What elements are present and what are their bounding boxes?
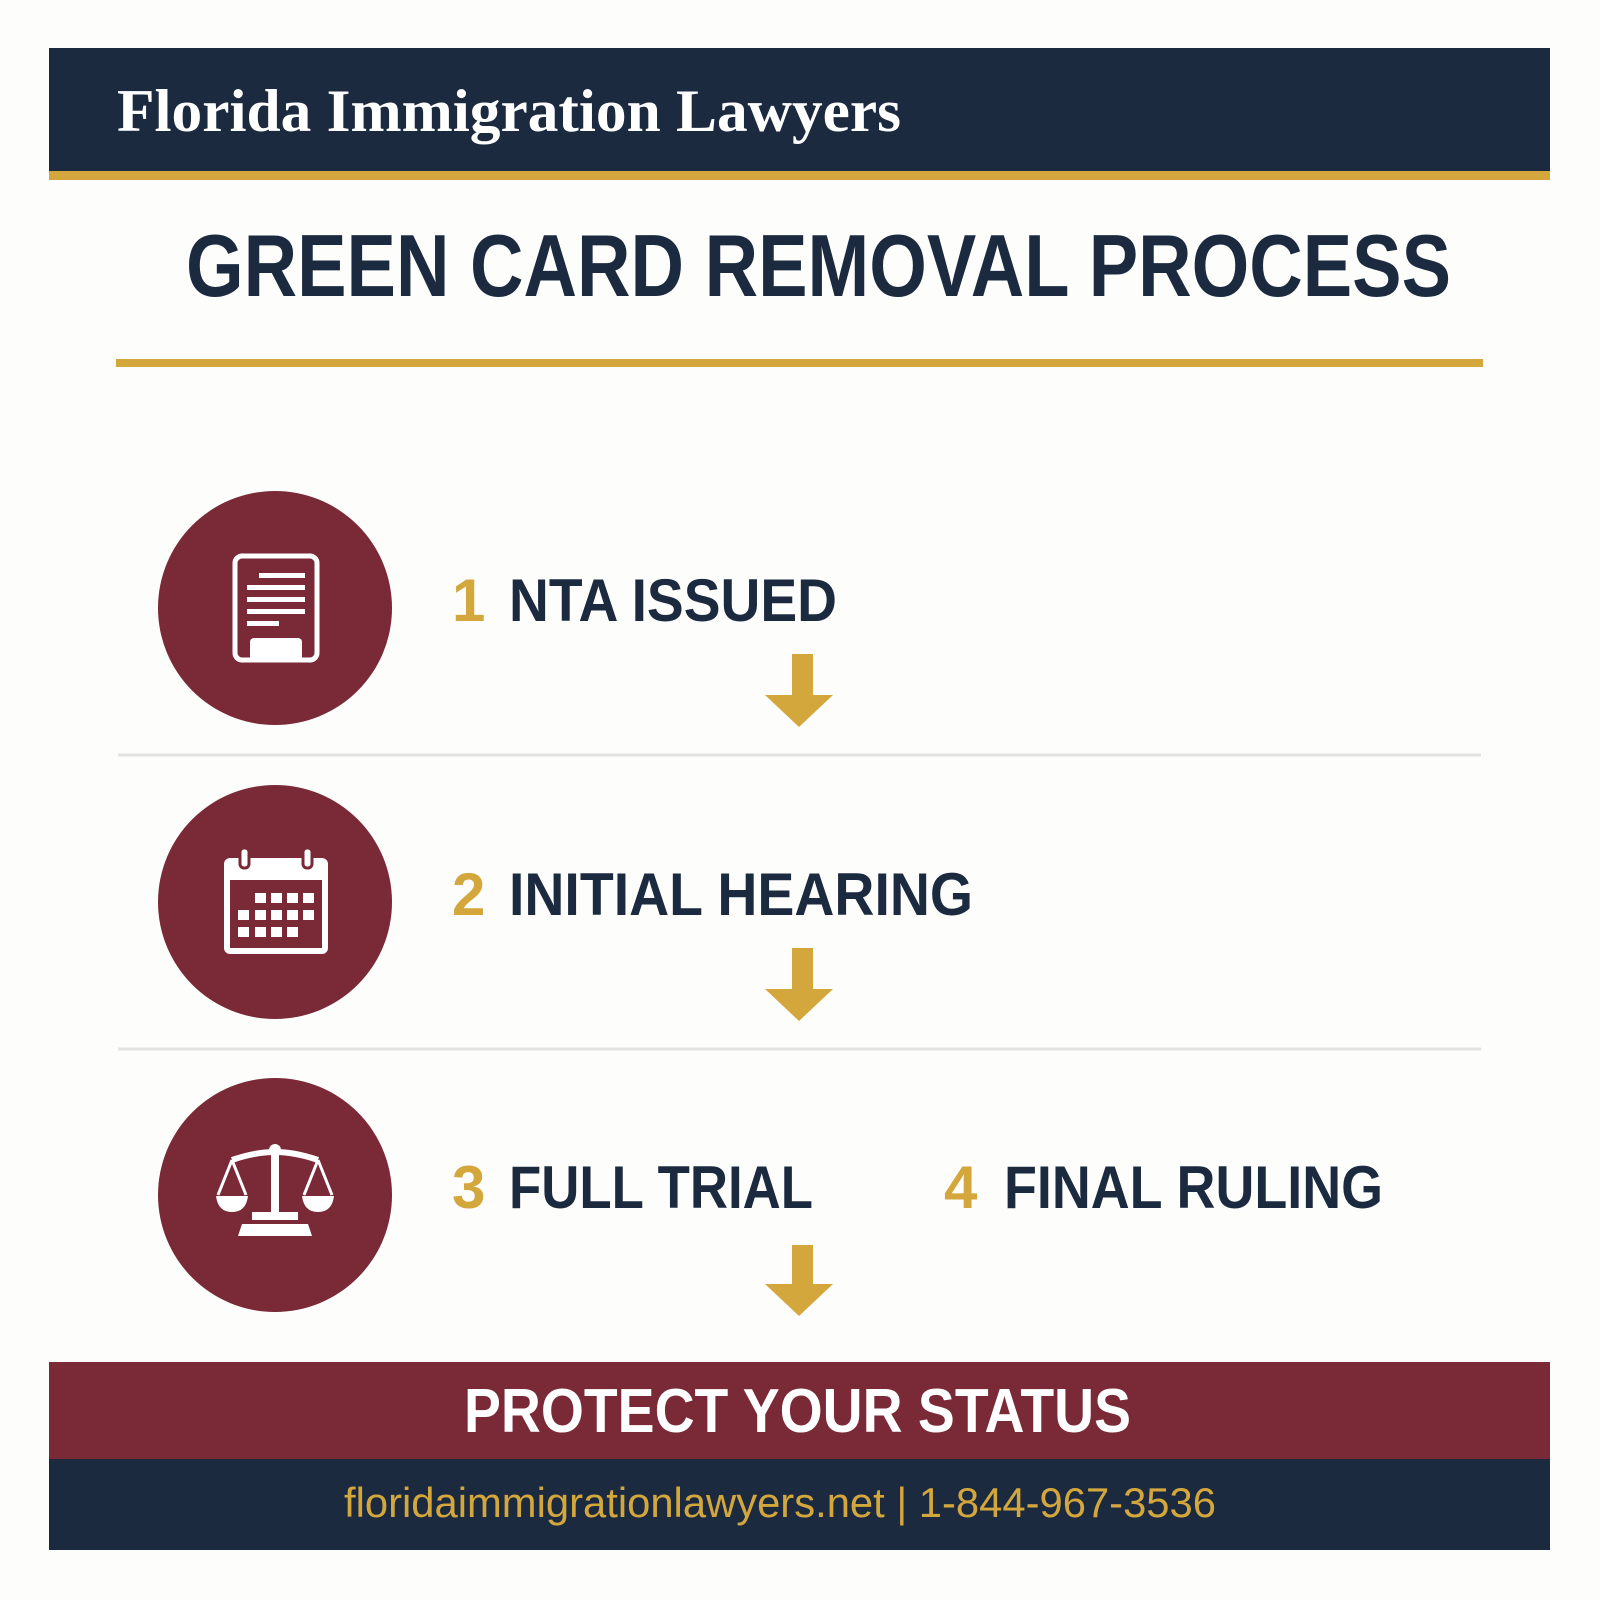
footer contact — [49, 1459, 1550, 1550]
banner: protect your status — [49, 1362, 1550, 1459]
footer contact: floridaimmigrationlawyers.net | 1-844-967-3536 — [344, 1479, 1216, 1526]
label 2: 2 — [452, 861, 485, 928]
step 3 and 4: trial and ruling — [158, 1078, 1383, 1316]
step 1: NTA issued — [158, 491, 837, 727]
step 2: initial hearing: INITIAL HEARING — [509, 861, 973, 928]
icon: scales — [158, 1078, 392, 1312]
banner: protect your status: PROTECT YOUR STATUS — [464, 1377, 1131, 1446]
step 1: NTA issued: NTA ISSUED — [509, 567, 837, 634]
header bar — [49, 48, 1550, 180]
title — [116, 216, 1483, 367]
label 3: 3 — [452, 1154, 485, 1221]
label 4: 4 — [944, 1154, 978, 1221]
step 3 and 4: trial and ruling: FINAL RULING — [1004, 1154, 1383, 1221]
arrow 1 — [765, 654, 833, 727]
arrow 2 — [765, 948, 833, 1021]
step 2: initial hearing — [158, 785, 973, 1021]
icon: document — [158, 491, 392, 725]
step 3 and 4: trial and ruling: FULL TRIAL — [509, 1154, 813, 1221]
arrow 3 — [765, 1245, 833, 1316]
label 1: 1 — [452, 567, 485, 634]
icon: calendar — [158, 785, 392, 1019]
header brand text: Florida Immigration Lawyers — [117, 78, 901, 144]
